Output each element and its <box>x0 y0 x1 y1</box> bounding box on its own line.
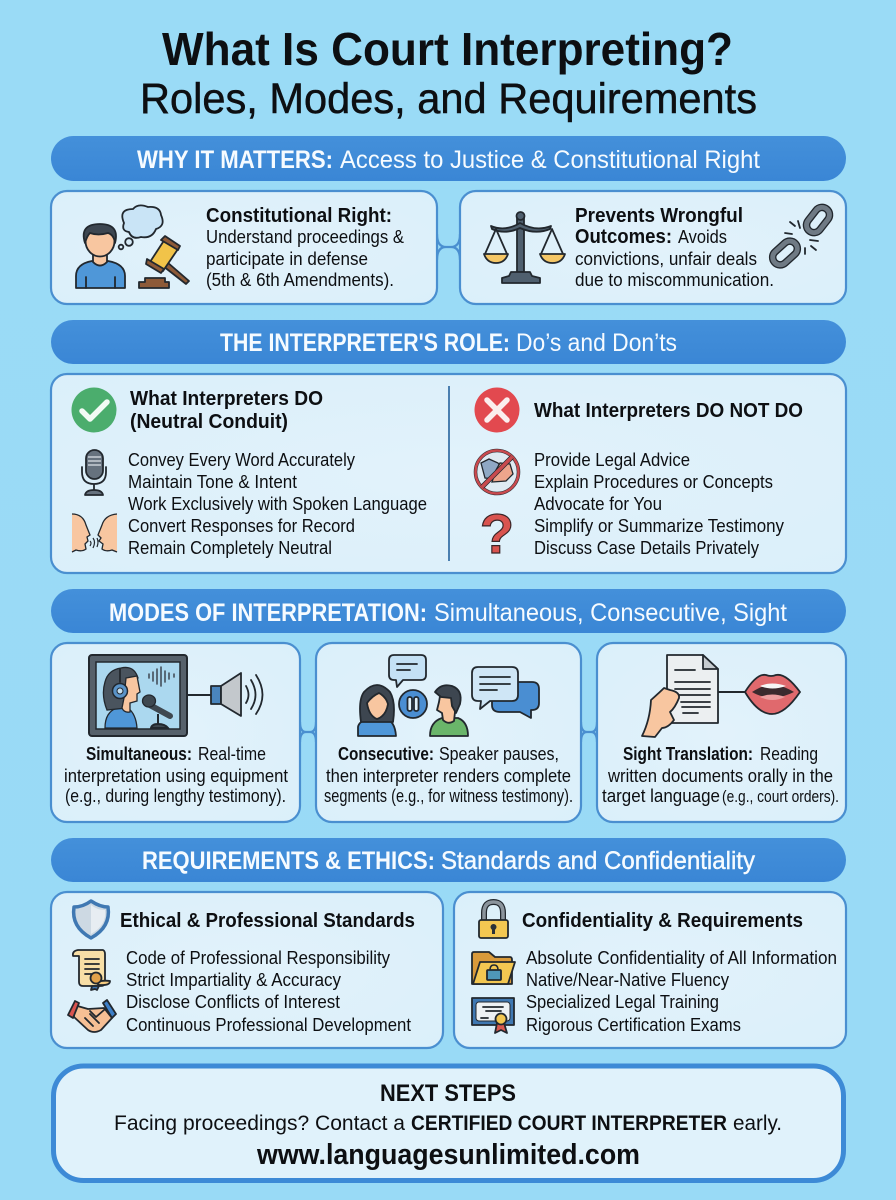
text: simultaneous: interpretation using equipment <box>64 765 288 786</box>
text: consecutive: then interpreter renders complete <box>326 765 571 786</box>
text: prevents wrongful outcomes: Prevents Wrongful <box>575 204 743 227</box>
icon: microphone <box>82 450 106 495</box>
banner: why it matters: Access to Justice & Constitutional Right <box>340 146 760 174</box>
icon: locked folder <box>472 952 515 984</box>
text: call to action: early. <box>733 1111 782 1135</box>
text: call to action: Facing proceedings? Contact a <box>114 1111 405 1135</box>
panel: ethical and professional standards <box>51 892 443 1048</box>
text: sight translation <box>602 743 839 806</box>
icon: interpreter booth with speaker <box>89 655 262 736</box>
list: what interpreters do: Remain Completely Neutral <box>128 537 332 558</box>
text: prevents wrongful outcomes: Outcomes: <box>575 225 672 248</box>
text: sight translation: Sight Translation: <box>623 743 753 764</box>
list: what interpreters do not do: Simplify or Summarize Testimony <box>534 515 785 536</box>
title <box>140 23 757 123</box>
icon: red x <box>474 388 520 432</box>
list: ethical standards: Disclose Conflicts of Interest <box>126 991 340 1012</box>
list: what interpreters do: Convert Responses for Record <box>128 515 355 536</box>
heading: what interpreters do not do: What Interpreters DO NOT DO <box>534 399 803 422</box>
panel: prevents wrongful outcomes <box>460 191 846 304</box>
heading: confidentiality and requirements: Confidentiality & Requirements <box>522 909 803 932</box>
banner: modes of interpretation <box>51 589 846 633</box>
icon: green check <box>72 388 116 432</box>
icon: two faces speaking <box>72 514 117 552</box>
text: constitutional right: (5th & 6th Amendments). <box>206 269 394 290</box>
list: what interpreters do not do: Explain Procedures or Concepts <box>534 471 773 492</box>
text: sight translation: target language <box>602 785 720 806</box>
list: confidentiality requirements <box>526 947 837 1035</box>
banner: why it matters: WHY IT MATTERS: <box>137 146 333 174</box>
text: simultaneous: Simultaneous: <box>86 743 192 764</box>
text: consecutive: Consecutive: <box>338 743 434 764</box>
heading: ethical and professional standards: Ethical & Professional Standards <box>120 909 415 932</box>
icon: hand holding document connected to lips <box>642 655 800 737</box>
panel: confidentiality and requirements <box>454 892 846 1048</box>
title: Roles, Modes, and Requirements <box>140 75 757 123</box>
banner: requirements and ethics: Standards and Confidentiality <box>441 847 755 875</box>
text: constitutional right <box>206 204 405 290</box>
list: what interpreters do not do: Advocate for You <box>534 493 662 514</box>
connector: mode cards <box>300 722 597 742</box>
text: consecutive: segments (e.g., for witness testimony). <box>324 785 573 806</box>
banner: requirements and ethics <box>51 838 846 882</box>
text: sight translation: Reading <box>760 743 818 764</box>
text: call to action: CERTIFIED COURT INTERPRETER <box>411 1111 727 1135</box>
list: confidentiality requirements: Rigorous Certification Exams <box>526 1014 741 1035</box>
icon: scales of justice <box>484 212 565 283</box>
icon: broken chain <box>770 204 833 268</box>
icon: question mark: ? <box>480 502 514 565</box>
list: what interpreters do: Work Exclusively with Spoken Language <box>128 493 427 514</box>
icon: two speakers with pause and speech bubbles <box>358 655 539 736</box>
panel: constitutional right <box>51 191 437 304</box>
heading: next steps: NEXT STEPS <box>380 1080 516 1107</box>
banner: modes of interpretation: Simultaneous, Consecutive, Sight <box>434 599 787 627</box>
text: prevents wrongful outcomes: Avoids <box>678 226 727 247</box>
text: simultaneous: Real-time <box>198 743 266 764</box>
connector: why it matters cards <box>437 234 460 260</box>
list: what interpreters do: Maintain Tone & Intent <box>128 471 297 492</box>
text: call to action <box>114 1111 782 1135</box>
list: what interpreters do: Convey Every Word Accurately <box>128 449 356 470</box>
list: ethical standards: Continuous Professional Development <box>126 1014 411 1035</box>
icon: certificate <box>472 998 514 1033</box>
banner: interpreter's role: Do’s and Don’ts <box>516 329 677 357</box>
text: consecutive <box>324 743 573 806</box>
heading: what interpreters do: What Interpreters DO <box>130 387 323 410</box>
text: prevents wrongful outcomes: due to miscommunication. <box>575 269 774 290</box>
heading: what interpreters do: (Neutral Conduit) <box>130 410 288 433</box>
list: what interpreters do <box>128 449 427 558</box>
panel: simultaneous <box>51 643 300 822</box>
list: ethical standards <box>126 947 411 1035</box>
text: constitutional right: Understand proceedings & <box>206 226 405 247</box>
banner: modes of interpretation: MODES OF INTERPRETATION: <box>109 599 427 627</box>
title: What Is Court Interpreting? <box>162 23 733 75</box>
banner: interpreter's role: THE INTERPRETER'S ROLE: <box>220 329 510 357</box>
list: ethical standards: Strict Impartiality & Accuracy <box>126 969 342 990</box>
icon: shield <box>74 901 108 938</box>
text: sight translation: (e.g., court orders). <box>722 788 839 806</box>
panel: sight translation <box>597 643 846 822</box>
text: constitutional right: Constitutional Right: <box>206 204 392 227</box>
list: confidentiality requirements: Absolute Confidentiality of All Information <box>526 947 837 968</box>
text: website: www.languagesunlimited.com <box>256 1139 640 1171</box>
list: what interpreters do not do <box>534 449 785 558</box>
panel: next steps <box>54 1066 844 1180</box>
list: confidentiality requirements: Native/Near-Native Fluency <box>526 969 730 990</box>
text: consecutive: Speaker pauses, <box>439 743 559 764</box>
icon: handshake <box>68 1000 116 1032</box>
banner: why it matters <box>51 136 846 181</box>
list: ethical standards: Code of Professional Responsibility <box>126 947 391 968</box>
icon: no handshake <box>476 450 518 494</box>
banner: interpreter's role <box>51 320 846 364</box>
icon: scroll <box>73 950 110 990</box>
text: sight translation: written documents orally in the <box>607 765 833 786</box>
text: prevents wrongful outcomes: convictions, unfair deals <box>575 248 757 269</box>
icon: padlock <box>479 902 508 938</box>
text: simultaneous: (e.g., during lengthy testimony). <box>65 785 286 806</box>
list: what interpreters do not do: Provide Legal Advice <box>534 449 690 470</box>
heading: what interpreters do <box>130 387 323 433</box>
text: prevents wrongful outcomes <box>575 204 774 290</box>
icon: person thinking with gavel <box>76 205 189 288</box>
panel: do's and don'ts <box>51 374 846 573</box>
list: confidentiality requirements: Specialized Legal Training <box>526 991 719 1012</box>
text: simultaneous <box>64 743 288 806</box>
list: what interpreters do not do: Discuss Case Details Privately <box>534 537 760 558</box>
banner: requirements and ethics: REQUIREMENTS & ETHICS: <box>142 847 435 875</box>
panel: consecutive <box>316 643 581 822</box>
text: constitutional right: participate in defense <box>206 248 368 269</box>
